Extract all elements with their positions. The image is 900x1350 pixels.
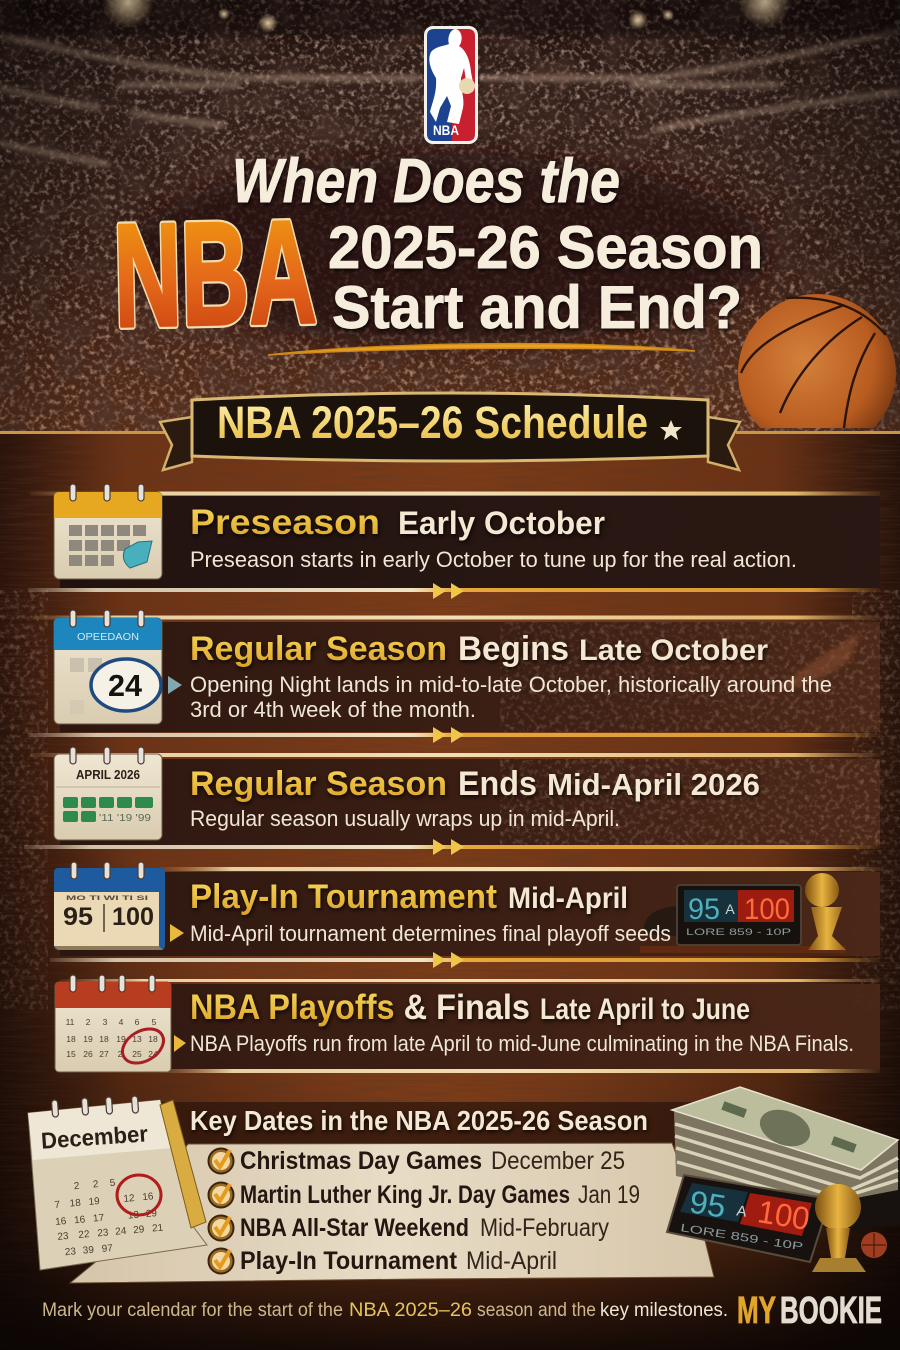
panel: regular season begins bbox=[28, 610, 880, 743]
logo ball bbox=[459, 78, 475, 94]
icon: calendar with red circle: 25 bbox=[132, 1049, 142, 1059]
icon: calendar with red circle: 15 bbox=[66, 1049, 76, 1059]
key date: All-Star: Mid-February bbox=[480, 1214, 609, 1242]
footer text: NBA 2025–26 bbox=[349, 1300, 472, 1321]
arrow bbox=[174, 1035, 186, 1052]
icon: basketball bbox=[738, 294, 896, 428]
scoreboard large: 95 bbox=[687, 1184, 728, 1225]
icon: December calendar: 5 bbox=[109, 1178, 116, 1189]
icon: calendar with red circle: 24 bbox=[148, 1049, 158, 1059]
emphasis: Ends bbox=[458, 765, 537, 803]
footer text bbox=[42, 1300, 728, 1321]
icon: calendar with red circle: 11 bbox=[66, 1017, 75, 1027]
arena background bbox=[0, 0, 900, 440]
scoreboard: A bbox=[725, 901, 735, 917]
icon: calendar 24 bbox=[54, 610, 162, 724]
MyBookie logo bbox=[737, 1290, 882, 1332]
icon: calendar April 2026: '11 '19 '99 bbox=[99, 813, 152, 824]
divider arrows bbox=[28, 583, 880, 599]
description: Regular season usually wraps up in mid-April. bbox=[190, 806, 620, 831]
icon: calendar with red circle: 2 bbox=[86, 1017, 91, 1027]
divider arrows bbox=[28, 727, 880, 743]
heading: Preseason bbox=[190, 503, 380, 542]
icon: December calendar: 7 bbox=[54, 1199, 61, 1211]
icon: December calendar: 12 bbox=[123, 1193, 135, 1205]
icon: December calendar: 23 bbox=[64, 1246, 77, 1258]
icon: calendar with red circle: 5 bbox=[152, 1017, 157, 1027]
player silhouette bbox=[429, 29, 473, 124]
icon: December calendar: 2 bbox=[92, 1179, 99, 1191]
icon: calendar April 2026 bbox=[54, 747, 162, 840]
NBA wordmark bbox=[112, 190, 318, 357]
MyBookie logo: MY bbox=[737, 1290, 776, 1332]
panel: regular season ends bbox=[24, 747, 880, 855]
key date: MLK: Jan 19 bbox=[578, 1181, 640, 1209]
title line 3: Start and End? bbox=[332, 274, 742, 341]
icon: December calendar: 16 bbox=[74, 1214, 86, 1226]
icon: calendar with red circle: 6 bbox=[135, 1017, 140, 1027]
NBA wordmark: NBA bbox=[112, 190, 318, 357]
icon: calendar 95-100: 100 bbox=[112, 903, 154, 931]
scoreboard: 95 bbox=[688, 893, 720, 926]
footer text: season and the bbox=[477, 1300, 596, 1321]
description: 3rd or 4th week of the month. bbox=[190, 697, 476, 722]
panel: preseason bbox=[28, 484, 880, 599]
description: Opening Night lands in mid-to-late October, historically around the bbox=[190, 672, 832, 697]
icon: December calendar: 2 bbox=[73, 1181, 80, 1192]
key date: Christmas bbox=[208, 1147, 625, 1175]
icon: calendar 95-100 bbox=[54, 862, 165, 950]
icon: December calendar: 23 bbox=[97, 1227, 109, 1239]
icon: December calendar: 16 bbox=[142, 1191, 154, 1203]
icon: December calendar: 29 bbox=[133, 1224, 145, 1236]
icon: calendar with red circle: 18 bbox=[66, 1034, 76, 1044]
icon: December calendar: 17 bbox=[93, 1213, 105, 1225]
icon: calendar with red circle bbox=[55, 975, 171, 1072]
icon: December calendar: 97 bbox=[101, 1243, 114, 1255]
icon: calendar April 2026: APRIL 2026 bbox=[76, 767, 140, 782]
key date: MLK: Martin Luther King Jr. Day Games bbox=[240, 1181, 570, 1209]
date: Mid-April 2026 bbox=[547, 767, 760, 802]
gold swoosh bbox=[268, 344, 695, 355]
key date: Play-In: Mid-April bbox=[466, 1247, 557, 1275]
icon: calendar 24: 24 bbox=[108, 668, 143, 703]
description: Preseason starts in early October to tune up for the real action. bbox=[190, 547, 797, 572]
star bbox=[660, 420, 682, 440]
icon: calendar with red circle: 2 bbox=[118, 1049, 123, 1059]
title line 1: When Does the bbox=[232, 147, 620, 216]
icon: calendar 24: OPEEDAON bbox=[77, 632, 139, 643]
parchment bbox=[70, 1143, 714, 1283]
title bbox=[112, 147, 763, 357]
icon: December calendar: 21 bbox=[152, 1223, 164, 1235]
icon: December calendar: 29 bbox=[145, 1208, 158, 1220]
footer text: Mark your calendar for the start of the bbox=[42, 1300, 343, 1321]
icon: December calendar: 39 bbox=[82, 1245, 95, 1257]
icon: calendar with red circle: 27 bbox=[99, 1049, 109, 1059]
key date: Play-In bbox=[208, 1247, 557, 1275]
icon: large trophy bbox=[812, 1184, 866, 1272]
icon: calendar with red circle: 19 bbox=[116, 1034, 126, 1044]
heading: NBA Playoffs & Finals bbox=[190, 988, 530, 1027]
scoreboard large: 100 bbox=[755, 1193, 812, 1237]
ribbon tails bbox=[160, 417, 192, 470]
icon: December calendar: 16 bbox=[55, 1216, 67, 1228]
key dates heading: Key Dates in the NBA 2025-26 Season bbox=[190, 1105, 648, 1136]
icon: trophy bbox=[805, 873, 846, 950]
schedule banner bbox=[160, 393, 740, 470]
key date: All-Star: NBA All-Star Weekend bbox=[240, 1214, 469, 1242]
arrow bbox=[170, 924, 184, 942]
icon: December calendar: December bbox=[40, 1120, 149, 1154]
icon: calendar 95-100: 95 bbox=[63, 903, 93, 931]
title line 2: 2025-26 Season bbox=[328, 214, 763, 281]
description: NBA Playoffs run from late April to mid-June culminating in the NBA Finals. bbox=[190, 1031, 854, 1056]
scoreboard large: A bbox=[735, 1202, 748, 1221]
panel: playoffs and finals bbox=[55, 975, 880, 1073]
emphasis: Begins bbox=[458, 630, 569, 668]
panel: play-in tournament bbox=[50, 862, 880, 968]
icon: December calendar: 22 bbox=[78, 1229, 90, 1241]
panel: key dates bbox=[28, 1087, 900, 1283]
scoreboard large bbox=[667, 1175, 830, 1262]
icon: December calendar: 23 bbox=[57, 1231, 70, 1243]
footer text: key milestones. bbox=[600, 1300, 728, 1321]
icon: calendar bbox=[54, 484, 162, 579]
heading: Regular Season bbox=[190, 765, 447, 803]
key date: Christmas: Christmas Day Games bbox=[240, 1147, 482, 1175]
heading: Regular Season bbox=[190, 630, 447, 668]
icon: calendar with red circle: 3 bbox=[103, 1017, 108, 1027]
icon: money stack bbox=[672, 1087, 900, 1232]
scoreboard bbox=[640, 885, 846, 953]
date: Late October bbox=[579, 634, 768, 667]
arrow bbox=[168, 676, 182, 694]
icon: small basketball bbox=[861, 1232, 887, 1258]
icon: December calendar: 13 bbox=[127, 1210, 140, 1222]
icon: calendar with red circle: 19 bbox=[83, 1034, 93, 1044]
logo wordmark: NBA bbox=[433, 122, 459, 138]
date: Late April to June bbox=[540, 993, 750, 1026]
scoreboard: 100 bbox=[744, 893, 790, 926]
NBA logo bbox=[424, 26, 478, 144]
divider arrows bbox=[24, 839, 880, 855]
key date: Play-In: Play-In Tournament bbox=[240, 1247, 458, 1275]
divider arrows bbox=[50, 952, 880, 968]
NBA wordmark: NBA bbox=[112, 190, 318, 357]
heading: Play-In Tournament bbox=[190, 878, 497, 916]
icon: calendar with red circle: 26 bbox=[83, 1049, 93, 1059]
icon: December calendar: 18 bbox=[69, 1198, 82, 1210]
date: Early October bbox=[398, 505, 605, 541]
icon: calendar with red circle: 13 bbox=[132, 1034, 142, 1044]
icon: December calendar bbox=[28, 1096, 207, 1270]
scoreboard: LORE 859 - 10P bbox=[686, 927, 791, 937]
description bbox=[190, 672, 832, 722]
icon: December calendar: 19 bbox=[88, 1196, 101, 1208]
schedule table edge rule bbox=[0, 431, 900, 434]
key date: All-Star bbox=[208, 1214, 609, 1242]
scoreboard large: LORE 859 - 10P bbox=[680, 1222, 804, 1253]
icon: calendar with red circle: 4 bbox=[119, 1017, 124, 1027]
icon: December calendar: 24 bbox=[115, 1226, 127, 1238]
description: Mid-April tournament determines final playoff seeds bbox=[190, 921, 671, 946]
icon: calendar with red circle: 18 bbox=[99, 1034, 109, 1044]
icon: calendar with red circle: 18 bbox=[148, 1034, 158, 1044]
banner heading: NBA 2025–26 Schedule bbox=[217, 397, 648, 448]
icon: calendar 95-100: MO TI WI TI SI bbox=[66, 896, 149, 902]
date: Mid-April bbox=[508, 882, 628, 915]
key date: Christmas: December 25 bbox=[491, 1147, 625, 1175]
